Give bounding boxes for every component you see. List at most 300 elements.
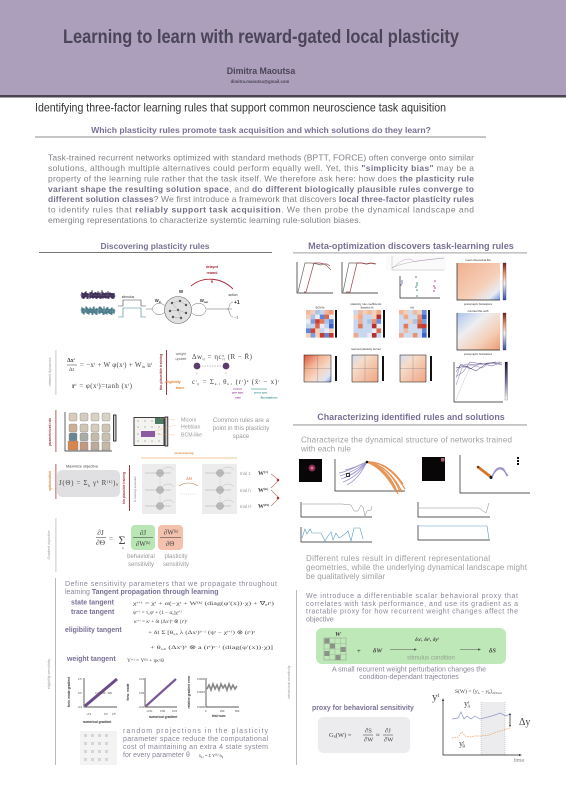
gradient validation scatter plots: forw. mode xyxy=(126,683,130,700)
gradient validation scatter plots: 500 xyxy=(235,709,240,713)
tangent labels xyxy=(65,600,122,663)
question heading: Which plasticity rules promote task acquisition and which solutions do they learn? xyxy=(91,125,431,135)
gradient validation scatter plots: 0.0000 xyxy=(197,705,205,709)
meta training networks: bio-plausible training xyxy=(122,472,126,504)
recurrent network W: W xyxy=(155,298,159,303)
rule names: BCM-like xyxy=(181,432,202,438)
gradient of objective equation: behavioral xyxy=(127,554,155,560)
heatmap top right: postsynaptic fluctuations xyxy=(464,302,493,306)
gradient of objective equation: ∂W xyxy=(164,528,174,536)
meta training header: meta-training xyxy=(174,451,194,455)
network dynamics equations: in xyxy=(142,365,145,369)
gradient of objective equation: Σ xyxy=(119,533,126,547)
gradient validation scatter plots: 0.0 xyxy=(104,712,108,716)
tangent equations: a,b xyxy=(173,632,179,637)
delayed reward arc xyxy=(191,265,233,289)
gradient of objective equation: ∂Θ xyxy=(96,538,106,547)
random projections text: (k) xyxy=(215,754,218,756)
meta training networks: W xyxy=(258,488,264,494)
tangent intro text xyxy=(65,581,277,596)
behavioral intro text: We introduce a differentiable scalar behavioral proxy that xyxy=(306,593,518,600)
tangent equations: ) xyxy=(271,600,274,607)
recurrent network W: out xyxy=(204,300,208,304)
learning curves xyxy=(297,262,378,293)
tangent equations: λ (Δx xyxy=(178,629,196,636)
meta training networks xyxy=(122,464,279,514)
gradient validation scatter plots: 0.0 xyxy=(78,691,82,695)
bio-plausible training rule: (r xyxy=(233,378,242,386)
proxy equation box: ∂S xyxy=(365,728,372,734)
tangent equations: + (1 − α xyxy=(154,609,172,616)
annotation: common rules: Common rules are a xyxy=(213,417,270,424)
coefficient matrices: BCM-fb xyxy=(316,306,325,310)
behavioral difference chart: B xyxy=(462,744,465,748)
introduction paragraph: emerging representations to characterize systemtic learning rule-solution biases. xyxy=(48,215,361,225)
annotation: common rules: space xyxy=(233,433,250,440)
sensitivity heatmaps xyxy=(304,347,432,382)
bio-plausible training rule: ij xyxy=(203,357,205,361)
behavioral difference chart: y xyxy=(464,699,468,708)
tangent equations: − χ xyxy=(216,630,228,636)
caption: dynamical structure: with each rule xyxy=(300,444,351,454)
green perturbation box: , δr xyxy=(420,637,430,643)
behavioral intro text: correlates with task performance, and use its gradient as a xyxy=(306,601,518,608)
heading: meta-optimization: Meta-optimization discovers task-learning rules xyxy=(308,241,514,251)
network dynamics equations: + W φ(x xyxy=(95,361,123,369)
bio-plausible training rule: rate xyxy=(235,396,241,400)
tangent equations: t+1 xyxy=(136,610,141,614)
tangent equations: ⊗ (r xyxy=(173,618,184,625)
bio-plausible training rule: = Σ xyxy=(200,378,214,386)
dynamics panel left xyxy=(299,459,405,542)
random projections text: for every parameter θ xyxy=(123,752,190,759)
tangent equations: ) xyxy=(169,618,171,625)
behavioral difference chart: B xyxy=(488,691,490,695)
tangent equations: ψ xyxy=(133,610,136,616)
objective box: k xyxy=(88,484,90,488)
delayed reward arc: delayed xyxy=(206,265,218,269)
trial outcomes: trial H xyxy=(240,504,251,509)
bio-plausible training rule: (R − R̄) xyxy=(225,353,253,361)
tangent equations: (Δx xyxy=(166,644,181,651)
bio-plausible training rule: k,l xyxy=(215,382,220,387)
bio-plausible training rule: t xyxy=(196,379,197,383)
caption: representational geometries: geometries, while the underlying dynamical landscape might xyxy=(306,563,528,572)
tangent equations: ψ xyxy=(150,610,154,616)
convergence line plot xyxy=(454,362,508,402)
meta training header xyxy=(141,451,237,458)
performance traces xyxy=(301,502,372,517)
tangent equations: t xyxy=(181,644,182,648)
bio-plausible training rule: ) xyxy=(244,378,247,386)
rule names: Miconi xyxy=(181,418,196,424)
random projections text: parameter space reduce the computational xyxy=(123,736,268,743)
tangent equations: Υ xyxy=(127,658,131,664)
bio-plausible training rule: Δw xyxy=(192,353,202,361)
gradient of objective equation: (k) xyxy=(146,541,151,545)
tangent equations: (k) xyxy=(144,658,148,662)
gradient validation scatter plots: 0.01 xyxy=(172,709,178,713)
weight matrix xyxy=(324,638,346,660)
bio-plausible training rule: ij xyxy=(223,357,225,361)
bio-plausible training rule: trace xyxy=(176,386,184,390)
gradient validation scatter plots: −0.01 xyxy=(138,705,145,709)
random projections text xyxy=(123,728,268,759)
subtitle: Identifying three-factor learning rules that support common neuroscience task aquisition xyxy=(35,102,446,114)
gradient validation scatter plots: relative gradient error xyxy=(187,675,191,708)
tangent equations: (k) xyxy=(197,600,202,604)
meta-optimization figure panel xyxy=(297,256,508,402)
tangent equations: t+1 xyxy=(137,600,143,604)
bio-plausible training rule: j xyxy=(196,371,198,375)
gradient validation scatter plots: −2.5 xyxy=(86,712,92,716)
bio-plausible training rule: − x) xyxy=(261,378,278,386)
speed map xyxy=(299,459,322,482)
bio-plausible training rule: c xyxy=(192,378,195,386)
random projections text: ij xyxy=(221,756,223,759)
gradient validation scatter plots: 0.0015 xyxy=(197,690,205,694)
tangent equations: t xyxy=(159,658,160,662)
gradient validation scatter plots: 2.5 xyxy=(112,712,116,716)
behavioral sensitivity panel: behavioral sensitivity xyxy=(287,665,291,699)
bio-plausible training rule: = ηc xyxy=(205,353,222,361)
green perturbation box: δx xyxy=(415,637,421,643)
green perturbation box: W xyxy=(335,631,342,638)
tangent equations: a xyxy=(253,630,256,634)
objective box: R xyxy=(99,479,107,487)
gradient validation scatter plots: 0.0030 xyxy=(197,677,205,681)
bio-plausible training rule: θ xyxy=(221,378,227,386)
bio-plausible training rule: post syn. xyxy=(254,390,268,394)
heatmap second right: contrast fbk-nofb xyxy=(468,309,489,313)
network dynamics equations: t xyxy=(128,383,130,387)
green perturbation box: + xyxy=(357,648,361,655)
gradient validation scatter plots: forw. mode gradient xyxy=(67,676,71,707)
delayed reward arc: R xyxy=(211,280,214,284)
gradient validation scatter plots: 2.5 xyxy=(78,677,82,681)
tangent equations: t+1 xyxy=(137,618,141,622)
tangent equations: (ψ xyxy=(206,629,216,636)
tangent equations: t xyxy=(209,644,211,648)
heatmap second right xyxy=(457,309,506,356)
heading: characterizing rules: Characterizing identified rules and solutions xyxy=(317,412,505,422)
parameterised rule grid xyxy=(48,410,116,452)
behavioral intro text xyxy=(306,593,518,624)
phase trajectories xyxy=(335,459,405,491)
tangent equations: + α(−χ xyxy=(156,600,181,607)
behavioral difference chart xyxy=(432,688,530,764)
gradient validation scatter plots: 0.01 xyxy=(139,677,145,681)
sensitivity heatmaps: learned plasticity kernel xyxy=(351,347,381,351)
network dynamics equations: t xyxy=(94,362,96,366)
trial outcomes xyxy=(240,471,251,509)
behavioral difference chart: time xyxy=(514,758,524,764)
tangent equations: t xyxy=(153,610,154,614)
tangent equations: x xyxy=(172,612,174,616)
bio-plausible training rule: pre syn. xyxy=(232,390,244,394)
behavioral intro text: objective xyxy=(306,616,334,624)
noise traces xyxy=(81,290,115,315)
gradient of objective equation: Gradient objective xyxy=(47,531,51,559)
network dynamics equations: ) + W xyxy=(124,361,142,369)
random projections text: k,l xyxy=(201,756,204,759)
tangent equations: b xyxy=(185,644,188,648)
gradient of objective equation: ∂W xyxy=(136,540,146,548)
behavioral difference chart: y xyxy=(432,691,438,703)
meta training networks: (H) xyxy=(264,503,270,507)
email: dimitra.maoutsa@gmail.com xyxy=(231,79,289,84)
coefficient matrices: Baseline fb xyxy=(361,306,374,310)
bio-plausible training rule: l xyxy=(278,379,279,383)
objective box: J(Θ) = Σ xyxy=(59,479,88,487)
tangent equations: t xyxy=(183,618,184,622)
network dynamics equations: Δt xyxy=(69,367,75,373)
introduction paragraph: variant shape the resulting solution space, and do different biologically plausible rules converge to xyxy=(48,184,474,194)
behavioral difference chart: t xyxy=(468,700,470,704)
inset curve plot xyxy=(386,256,446,271)
behavioral difference chart: y xyxy=(459,739,463,748)
gradient validation scatter plots: trial num. xyxy=(212,714,226,718)
network dynamics equations: t xyxy=(97,383,99,387)
tangent equations: a xyxy=(186,618,188,622)
random projections text: ξ xyxy=(199,753,201,758)
tangent equations: (diag(φ′(x))·χ) + ∇ xyxy=(202,600,266,607)
network dynamics equations: = φ(x xyxy=(77,382,97,390)
tangent equations: t xyxy=(250,630,251,634)
introduction paragraph: to identify rules that reliably support task acquisition. We then probe the dynamical landscape and xyxy=(48,204,474,214)
gradient validation scatter plots: numerical gradient xyxy=(83,720,112,724)
tangent equations: b xyxy=(171,618,173,622)
network dynamics equations: t xyxy=(123,362,125,366)
proxy equation box: S xyxy=(334,735,336,739)
tangent equations: a−1 xyxy=(213,644,221,648)
objective box: optimization xyxy=(48,471,52,491)
network dynamics equations: )=tanh (x xyxy=(98,382,128,390)
tangent equations: )χ xyxy=(174,609,179,616)
behavioral difference chart: Δy xyxy=(519,717,530,728)
heatmap top right xyxy=(457,258,506,306)
action output: action xyxy=(228,293,238,297)
tangent equations: κ xyxy=(134,619,137,625)
proxy equation box: ≈ xyxy=(376,732,380,739)
caption: dynamical structure xyxy=(300,436,512,454)
annotation: common rules: point in this plasticity xyxy=(213,425,270,432)
tangent equations: = κ xyxy=(141,619,149,625)
trial outcomes: trial 1 xyxy=(240,471,251,476)
behavioral difference chart: t xyxy=(488,688,489,692)
tangent propagation panel xyxy=(47,578,277,765)
gradient validation scatter plots xyxy=(67,675,240,724)
tangent labels: trace tangent xyxy=(71,609,115,616)
tangent equations: ⊗ a (r xyxy=(187,644,210,651)
tangent equations xyxy=(127,600,274,664)
objective box: γ xyxy=(91,479,96,487)
tangent equations: x xyxy=(148,612,150,616)
tangent equations: ) xyxy=(182,644,185,651)
tangent equations: t xyxy=(169,618,170,622)
gradient of objective equation: ∂J xyxy=(97,528,104,537)
tangent equations: t xyxy=(180,600,181,604)
recurrent network W: W xyxy=(179,289,184,294)
tangent equations: ) ⊗ (r xyxy=(233,629,250,636)
tangent equations: t xyxy=(155,600,156,604)
bio-plausible training rule: ij xyxy=(197,382,199,386)
behavioral difference chart: A xyxy=(478,691,481,695)
recurrent network W: W xyxy=(200,298,204,303)
introduction paragraph: Task-trained recurrent networks optimized with standard methods (BPTT, FORCE) often converge onto similar xyxy=(48,152,474,162)
gradient of objective equation: ∂Θ xyxy=(166,540,174,548)
caption: representational geometries: Different rules result in different representational xyxy=(306,554,490,563)
tangent equations: = χ xyxy=(143,601,156,607)
behavioral difference chart: t∈Ttest xyxy=(492,691,502,695)
behavioral difference chart: ⟩ xyxy=(490,688,492,695)
green perturbation box: t xyxy=(421,636,422,640)
trial outcomes: trial h xyxy=(240,488,251,493)
diagram: recurrent network schematic xyxy=(81,265,240,324)
objective box xyxy=(48,464,120,499)
network dynamics equations: ) xyxy=(130,382,133,390)
tangent equations: + θ xyxy=(150,645,157,651)
tangent equations: χ xyxy=(133,601,135,607)
behavioral sensitivity panel xyxy=(287,590,530,765)
tangent labels: eligibility tangent xyxy=(65,627,122,634)
bio-plausible training rule: t xyxy=(259,379,260,383)
gradient validation scatter plots: 0.00 xyxy=(139,691,145,695)
network dynamics equations: t xyxy=(76,383,78,387)
gradient validation scatter plots: 0.1 · 250 · 500 xyxy=(95,691,113,695)
introduction paragraph xyxy=(48,152,474,225)
bio-plausible training rule: T xyxy=(222,354,225,358)
header banner xyxy=(0,0,566,98)
tangent equations: = τ xyxy=(140,610,149,616)
gradient of objective equation: sensitivity xyxy=(128,562,154,568)
parameter update arrow: ΔΘ xyxy=(186,476,192,481)
gradient validation scatter plots: 250 xyxy=(220,709,225,713)
annotation: common rules xyxy=(213,417,270,440)
proxy equation box: ∂W xyxy=(384,736,394,744)
proxy equation box: ∂J xyxy=(385,728,391,734)
bio-plausible training rule: fluctuations xyxy=(260,396,278,400)
tangent equations: ) xyxy=(211,644,214,651)
title: Learning to learn with reward-gated local plasticity xyxy=(63,26,459,48)
gradient validation scatter plots: 0 xyxy=(205,709,207,713)
network dynamics equations xyxy=(48,350,153,395)
green perturbation box: δW xyxy=(373,648,383,654)
tangent equations: t xyxy=(270,600,272,604)
tangent equations: = Υ xyxy=(135,658,144,664)
gradient of objective equation: plasticity xyxy=(164,554,188,560)
proxy heading: proxy for behavioral sensitivity xyxy=(312,705,414,712)
network dynamics equations: = −x xyxy=(80,361,94,369)
rule matrix with common rules xyxy=(134,417,202,446)
proxy equation box: G xyxy=(329,732,334,739)
gradient validation scatter plots: numerical gradient xyxy=(149,715,178,719)
tangent labels: weight tangent xyxy=(66,656,116,663)
network dynamics equations: t xyxy=(151,362,153,366)
objective box: S xyxy=(116,483,118,487)
dynamics panel right xyxy=(418,455,530,540)
green perturbation box: t xyxy=(438,636,439,640)
introduction paragraph: property of the learning rule rather that the task itself. We therefore ask here: how does the plasticity rule xyxy=(48,174,474,184)
tangent equations: (diag(φ′(x))·χ)] xyxy=(220,644,273,651)
meta training networks: W xyxy=(258,471,264,477)
objective box: (k) xyxy=(107,480,113,484)
action output: −1 xyxy=(234,316,238,320)
bio-plausible training rule xyxy=(159,350,279,400)
behavioral intro text: tractable proxy for how recurrent weight changes affect the xyxy=(306,608,518,616)
gradient validation scatter plots: 0.00 xyxy=(160,709,166,713)
tangent equations: /θ xyxy=(160,658,164,664)
random projections text: random projections in the plasticity xyxy=(123,728,268,735)
behavioral difference chart: A xyxy=(467,704,471,708)
bio-plausible training rule: bio-plausible training xyxy=(159,354,163,390)
bio-plausible training rule: eligibility xyxy=(165,380,181,384)
random projections text: = Σ Υ xyxy=(204,753,216,758)
behavioral difference chart: t xyxy=(438,693,440,699)
random projection grid xyxy=(80,731,117,765)
tangent intro text: Define sensitivity parameters that we propagate throughout xyxy=(65,581,277,588)
tangent equations: b−1 xyxy=(200,630,207,634)
network dynamics equations: Δx xyxy=(67,358,74,364)
meta training networks: (h) xyxy=(264,487,269,491)
tangent labels: state tangent xyxy=(71,600,115,606)
action output: +1 xyxy=(234,300,240,306)
perturbation caption: A small recurrent weight perturbation changes the xyxy=(332,666,486,674)
tangent intro text: learning Tangent propagation through learning xyxy=(65,589,218,596)
caption: representational geometries: be qualitatively similar xyxy=(306,572,385,581)
caption: representational geometries xyxy=(306,554,528,581)
synapse neurons xyxy=(194,363,200,369)
network dynamics equations: t xyxy=(74,357,76,361)
recurrent network W: in xyxy=(159,300,162,304)
behavioral difference chart: t xyxy=(463,740,465,744)
parameterised rule grid: parameterized rule xyxy=(48,418,52,446)
objective box: k xyxy=(97,480,99,484)
green perturbation box: stimulus condition xyxy=(407,656,455,662)
perturbation caption xyxy=(332,666,486,681)
rule names: Hebbian xyxy=(181,424,200,430)
tangent equations: t+1 xyxy=(178,610,182,614)
tangent equations: ) xyxy=(184,618,186,625)
objective box: ) xyxy=(113,479,116,487)
coefficient matrices: Adi xyxy=(410,306,414,310)
action output xyxy=(227,293,240,320)
proxy equation box: ∂W xyxy=(364,736,374,744)
bio-plausible training rule: update xyxy=(176,357,186,361)
behavioral sensitivity term xyxy=(131,525,155,550)
behavioral difference chart: − y xyxy=(480,689,489,695)
network dynamics equations: network dynamics xyxy=(48,357,52,386)
tangent equations: ) xyxy=(197,629,200,636)
gradient of objective equation: k xyxy=(122,546,124,550)
tangent equations: t+1 xyxy=(131,658,135,662)
coefficient matrices: plasticity rule coefficients xyxy=(351,302,382,306)
rule scatter plot xyxy=(400,276,440,298)
caption: dynamical structure: Characterize the dynamical structure of networks trained xyxy=(301,436,512,444)
tangent equations: a,b xyxy=(161,647,167,652)
gradient of objective equation: = xyxy=(109,534,113,543)
green perturbation box xyxy=(316,628,506,664)
perturbation caption: condition-dependant trajectories xyxy=(359,674,459,681)
tangent equations: t xyxy=(196,630,197,634)
meta training networks: W xyxy=(258,504,264,510)
green perturbation box: δS xyxy=(489,648,496,654)
tangent equations: + W xyxy=(181,601,197,607)
delayed reward arc: reward xyxy=(207,271,217,275)
gradient of objective equation: (k) xyxy=(174,530,179,534)
tangent equations: + δt Σ [θ xyxy=(148,630,166,636)
bio-plausible training rule: k,l xyxy=(227,382,232,387)
